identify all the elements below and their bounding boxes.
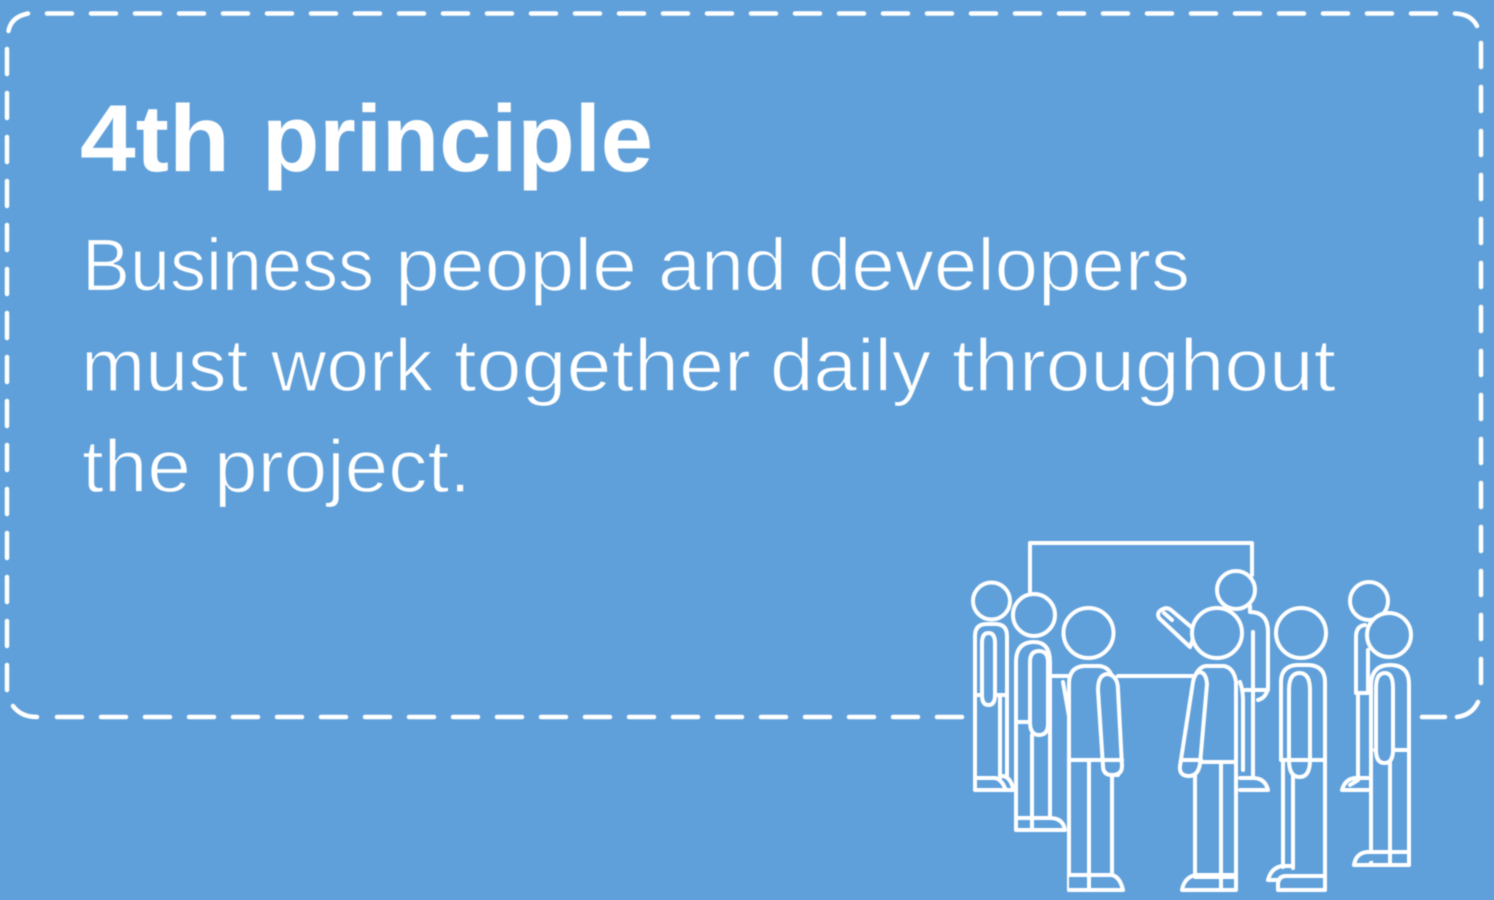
- person: far right back: [1342, 582, 1388, 790]
- person: far left: [973, 582, 1013, 790]
- title: 4th: [80, 86, 230, 192]
- body text: work: [270, 324, 434, 407]
- body text: daily: [770, 324, 931, 407]
- body text: project.: [214, 425, 471, 508]
- whiteboard: [1030, 543, 1252, 716]
- body text: Business: [82, 224, 374, 306]
- person: far right front: [1354, 613, 1411, 865]
- person: second left: [1013, 594, 1065, 830]
- title: principle: [262, 86, 653, 192]
- body text: the: [82, 425, 191, 508]
- body text: together: [454, 324, 751, 407]
- person: front centre with raised arm: [1158, 608, 1243, 890]
- person: front left: [1064, 608, 1123, 890]
- person: front right: [1268, 608, 1326, 890]
- body text: must: [81, 324, 248, 407]
- body text: throughout: [952, 324, 1336, 407]
- title: [80, 86, 653, 192]
- body text: [81, 224, 1336, 508]
- body text: developers: [808, 224, 1190, 306]
- icon: team gathered around a board: [973, 543, 1411, 890]
- dashed rounded panel border: [7, 14, 1481, 717]
- body text: and: [658, 224, 787, 306]
- person: presenter at board: [1217, 571, 1268, 790]
- body text: people: [395, 224, 637, 306]
